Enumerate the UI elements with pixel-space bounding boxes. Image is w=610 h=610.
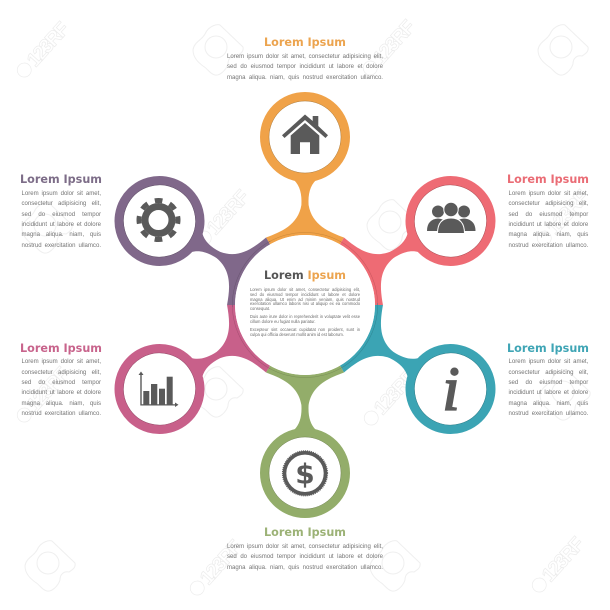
text: lower left	[22, 358, 101, 417]
text: bottom: Lorem ipsum dolor sit amet, consectetur adipisicing elit,	[227, 544, 383, 550]
segment: orange top	[264, 96, 346, 244]
heading: upper left: Lorem Ipsum	[20, 172, 102, 186]
text: upper right: incididunt ut labore et dolore	[508, 222, 588, 228]
text: lower left: sed do eiusmod tempor	[22, 380, 101, 386]
text: top: Lorem ipsum dolor sit amet, consectetur adipisicing elit,	[227, 54, 383, 60]
text: lower right	[508, 358, 588, 417]
text: top	[227, 54, 383, 81]
segment: green bottom	[264, 366, 346, 514]
text: upper right	[508, 190, 588, 249]
segment: teal lower right	[337, 300, 506, 444]
text: center paragraph 3: Excepteur sint occaecat cupidatat non proident, sunt in	[250, 327, 360, 332]
icon: people	[427, 202, 476, 234]
text: center paragraph 3	[250, 327, 360, 337]
text: bottom: magna aliqua. niam, quis nostrud exercitation ullamco.	[227, 565, 383, 571]
heading: lower left: Lorem Ipsum	[20, 342, 102, 354]
text: lower right: consectetur adipisicing elit,	[508, 370, 588, 376]
segment: purple upper left	[104, 166, 273, 310]
text: upper right: Lorem ipsum dolor sit amet,	[508, 191, 588, 197]
text: center paragraph 1	[250, 287, 360, 311]
text: upper right: consectetur adipisicing elit,	[508, 201, 588, 207]
text: lower left: nostrud exercitation ullamco.	[22, 411, 101, 417]
text: top: sed do eiusmod tempor incididunt ut labore et dolore	[227, 64, 383, 70]
text: center paragraph 1: Lorem ipsum dolor sit amet, consectetur adipisicing elit,	[250, 287, 360, 292]
text: upper left: incididunt ut labore et dolore	[22, 222, 101, 228]
text: lower right: incididunt ut labore et dolore	[508, 390, 588, 396]
icon: dollar coin	[282, 451, 328, 496]
text: center paragraph 1: sed do eiusmod tempor incididunt ut labore et dolore	[250, 292, 360, 297]
text: center paragraph 1: consequat.	[250, 306, 270, 311]
text: upper right: sed do eiusmod tempor	[508, 212, 588, 218]
text: lower right: nostrud exercitation ullamco.	[508, 411, 588, 417]
text: lower right: Lorem ipsum dolor sit amet,	[508, 359, 588, 365]
text: lower right: sed do eiusmod tempor	[508, 380, 588, 386]
text: upper left: magna aliqua. niam, quis	[22, 232, 101, 238]
icon: dollar coin: $	[295, 458, 315, 490]
text: lower left: magna aliqua. niam, quis	[22, 401, 101, 407]
icon: house	[282, 114, 328, 154]
heading: bottom: Lorem Ipsum	[264, 526, 346, 539]
text: center paragraph 1: magna aliqua. Ut enim ad minim veniam, quis nostrud	[250, 297, 360, 302]
text: lower left: consectetur adipisicing elit,	[22, 370, 101, 376]
text: lower left: Lorem ipsum dolor sit amet,	[22, 359, 101, 365]
text: center paragraph 1: exercitation ullamco laboris nisi ut aliquip ex ea commodo	[250, 301, 360, 306]
central circle	[235, 235, 375, 375]
heading: upper right: Lorem Ipsum	[507, 172, 589, 186]
text: upper left: nostrud exercitation ullamco.	[22, 243, 101, 249]
text: upper right: nostrud exercitation ullamco.	[508, 243, 588, 249]
text: upper left	[22, 190, 101, 249]
icon: bar chart	[138, 372, 178, 407]
text: upper left: Lorem ipsum dolor sit amet,	[22, 191, 101, 197]
segment: pink lower left	[104, 300, 273, 444]
text: lower left: incididunt ut labore et dolore	[22, 390, 101, 396]
text: center paragraph 2	[250, 314, 360, 324]
text: bottom	[227, 544, 383, 571]
text: center paragraph 2: Duis aute irure dolor in reprehenderit in voluptate velit esse	[250, 314, 360, 319]
text: lower right: magna aliqua. niam, quis	[508, 401, 588, 407]
icon: info: i	[442, 356, 460, 424]
text: center paragraph 2: cillum dolore eu fugiat nulla pariatur.	[250, 319, 316, 324]
text: upper left: consectetur adipisicing elit,	[22, 201, 101, 207]
text: upper right: magna aliqua. niam, quis	[508, 232, 588, 238]
text: center paragraph 3: culpa qui officia deserunt mollit anim id est laborum.	[250, 332, 344, 337]
heading: top: Lorem Ipsum	[264, 36, 346, 49]
text: upper left: sed do eiusmod tempor	[22, 212, 101, 218]
text: top: magna aliqua. niam, quis nostrud exercitation ullamco.	[227, 75, 383, 81]
text: bottom: sed do eiusmod tempor incididunt ut labore et dolore	[227, 554, 383, 560]
heading: center: Lorem Ipsum	[264, 269, 346, 282]
icon: gear	[139, 200, 178, 240]
segment: red upper right	[337, 166, 506, 310]
heading: lower right: Lorem Ipsum	[507, 342, 589, 354]
